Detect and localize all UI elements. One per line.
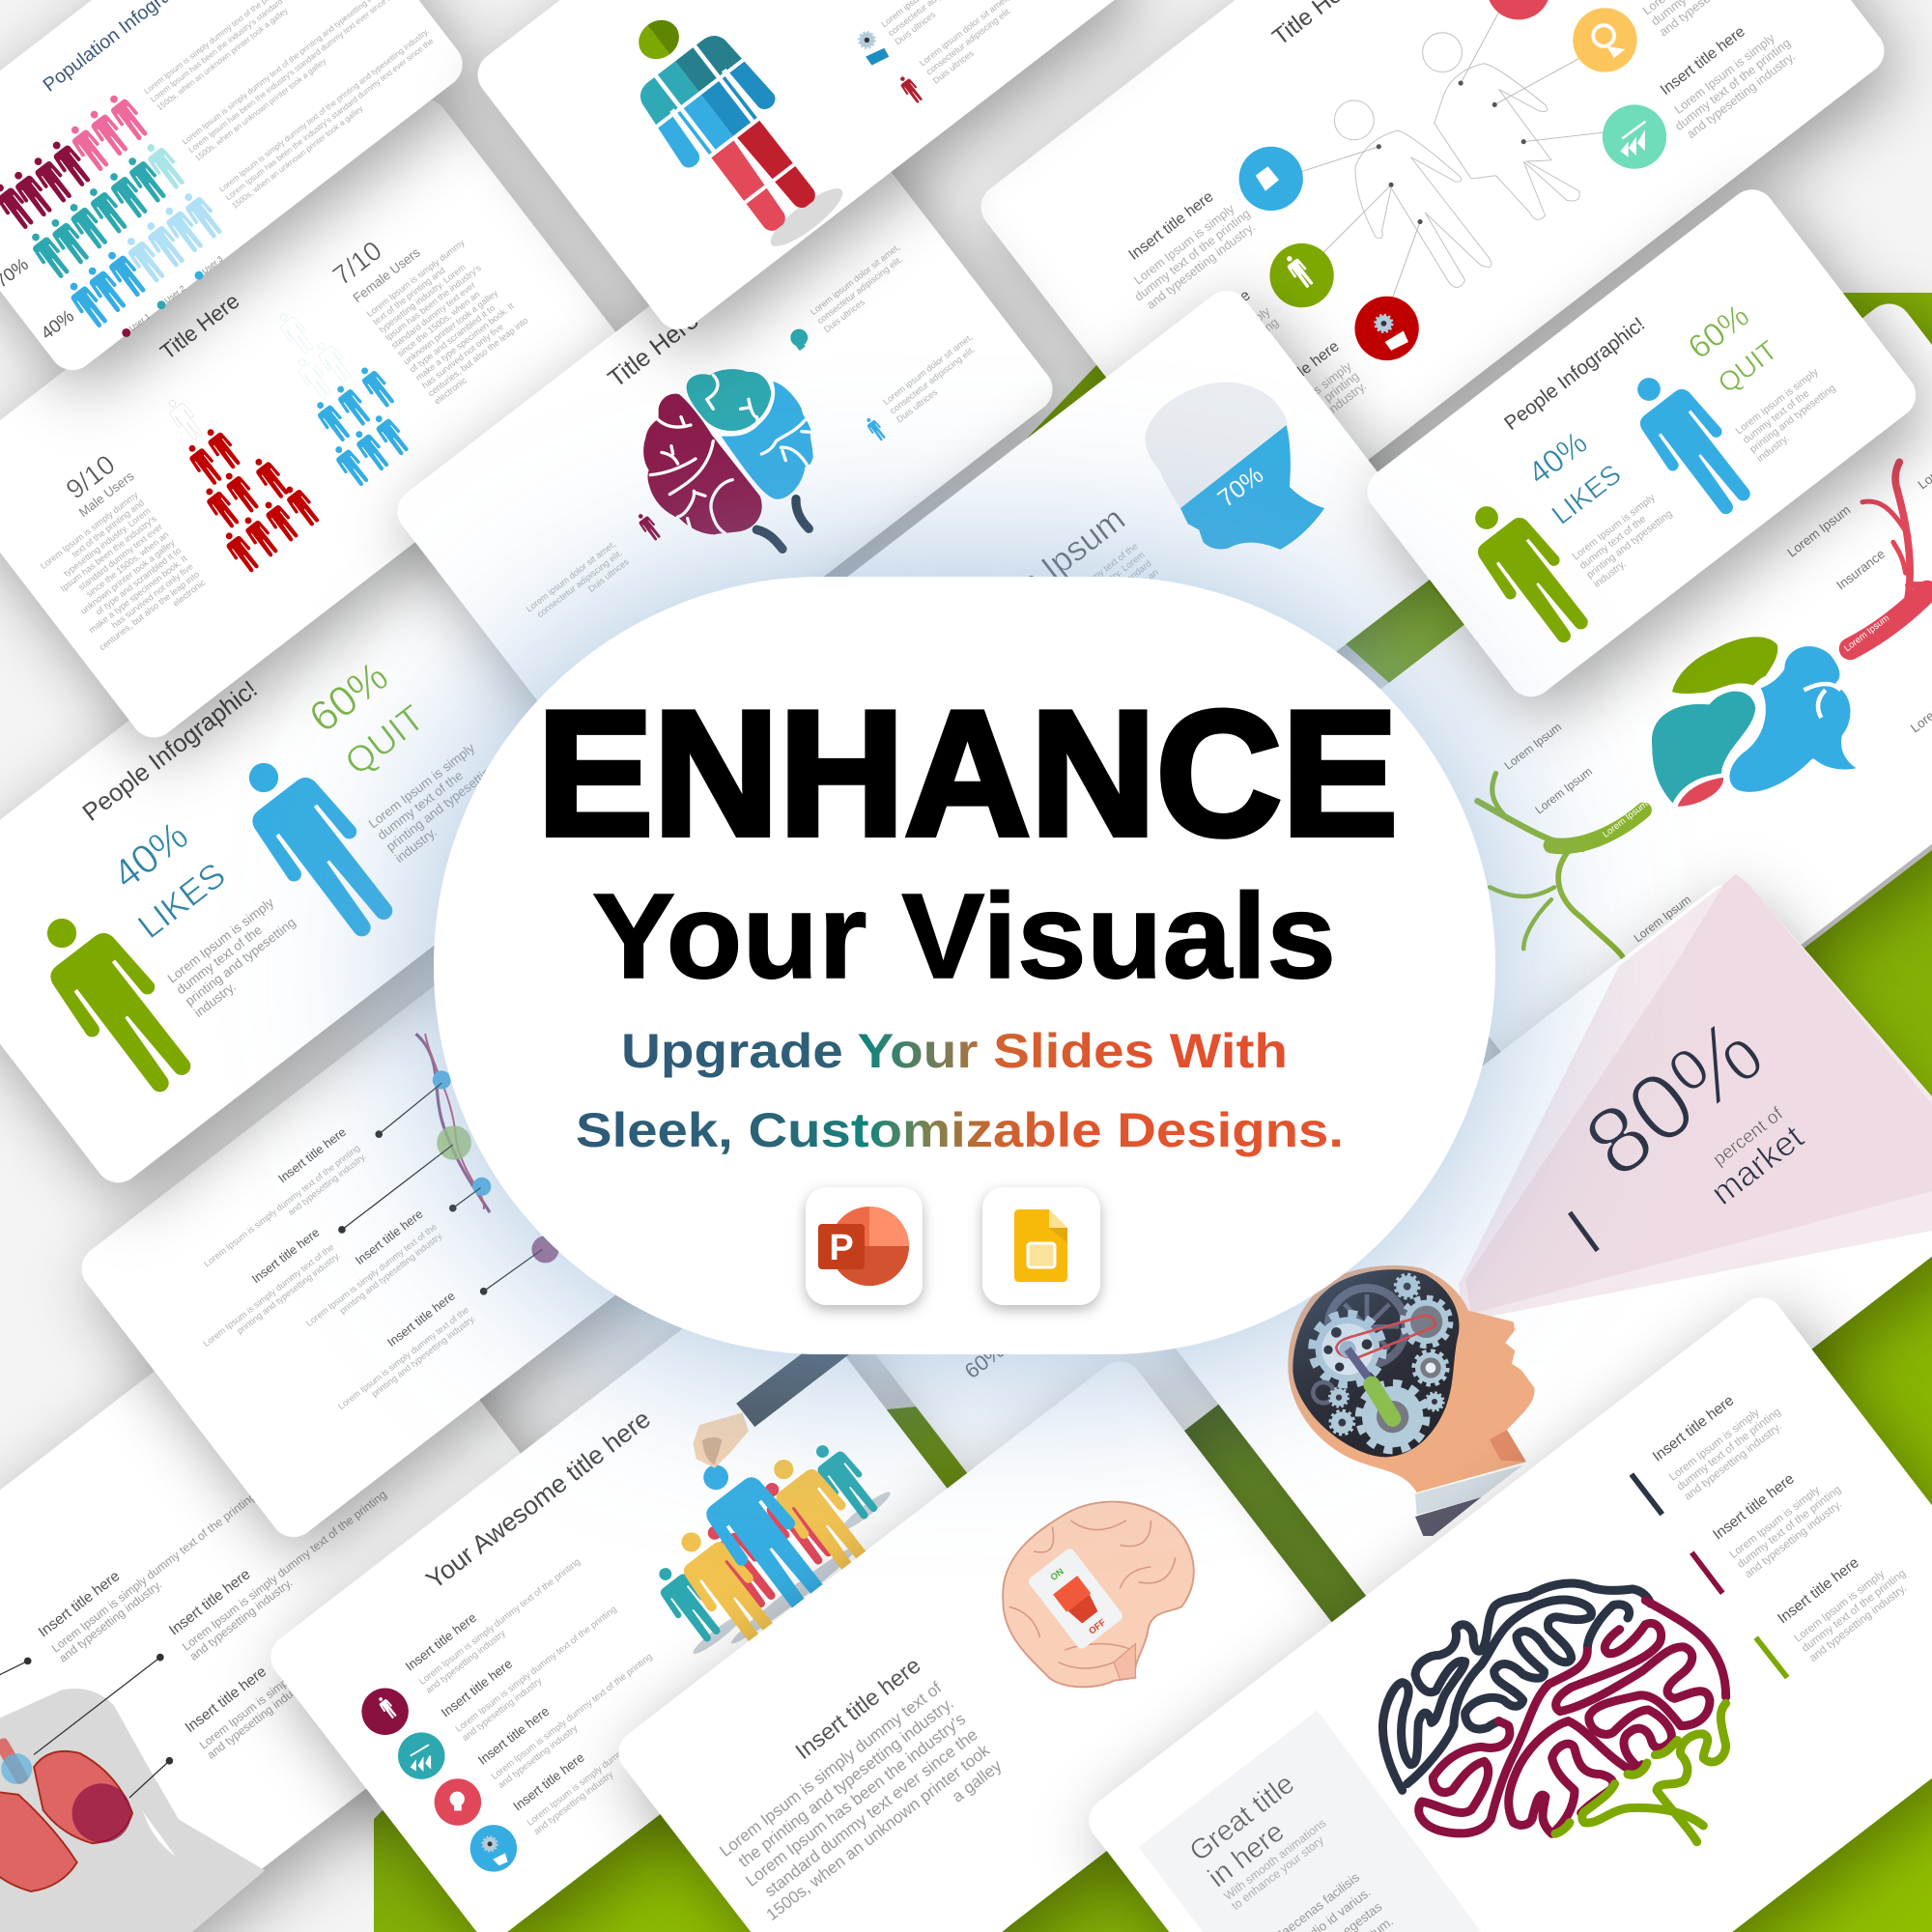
side icons and text (859, 0, 1024, 105)
80 percent stat: percent of (1710, 1103, 1787, 1170)
dividers and list text: Lorem Ipsum is simply (1667, 1406, 1762, 1484)
panel: brain title slide (D) (388, 139, 1062, 761)
legend: User 2 (162, 283, 187, 305)
stats: LIKES (1547, 459, 1627, 531)
list items (403, 1556, 697, 1837)
text: typesetting industry. Lorem (377, 262, 468, 335)
panel: large people and users slides (0, 90, 726, 1192)
heading and paragraphs: 1500s, when an unknown printer took a galley (155, 5, 290, 112)
heading and paragraphs: Lorem Ipsum has been the industry's standard dummy text ever since the (223, 36, 436, 202)
head chart 70% (1145, 383, 1324, 550)
side text: Duis ultrices (822, 297, 867, 334)
side text: consectetur adipiscing elit. (535, 548, 624, 619)
legend: User 1 (128, 311, 152, 333)
panel: maze brain slide (1080, 1289, 1932, 1932)
text: Ipsum has been the industry's (384, 263, 483, 343)
text block: Lorem Ipsum has been the industry's (742, 1709, 969, 1890)
text: has survived not only five (110, 561, 195, 630)
80 percent stat: market (1704, 1118, 1811, 1212)
text: electronic (171, 577, 208, 609)
text: Female Users (351, 244, 423, 305)
H slide text: dummy text of the printing (1160, 315, 1281, 412)
lungs slide text: Lorem Ipsum is simply dummy text of the printing (49, 1490, 259, 1656)
captions: Lorem Ipsum is simply (366, 741, 477, 831)
list items: Lorem Ipsum is simply dummy text of the printing (526, 1697, 691, 1829)
panel: lungs slide (0, 1225, 625, 1932)
list items: Lorem Ipsum is simply dummy text of the printing (490, 1652, 655, 1782)
heading and paragraphs: 1500s, when an unknown printer took a galley (193, 55, 328, 163)
captions: dummy text of the (1577, 513, 1648, 572)
pink beam cone (1459, 874, 1932, 1321)
H slide text: Lorem Ipsum is simply (1131, 201, 1236, 287)
people rows chart (0, 90, 227, 331)
captions: Lorem Ipsum is simply (165, 895, 276, 985)
brain with switch: ON (1048, 1567, 1066, 1583)
heading: Title Here (604, 307, 703, 393)
captions: printing and typesetting (1584, 508, 1675, 581)
captions: Lorem Ipsum is simply (1734, 366, 1821, 437)
great title box: With smooth animations (1221, 1816, 1328, 1903)
text: electronic (433, 375, 469, 407)
text block: 1500s, when an unknown printer took (762, 1740, 993, 1924)
text: Lorem Ipsum is simply dummy (365, 238, 467, 319)
lungs slide text: and typesetting industry. (56, 1577, 164, 1665)
dividers and list text: dummy text of the printing (1800, 1568, 1908, 1655)
panel: body veins slide (72, 852, 825, 1547)
great title box: to enhance your story (1229, 1833, 1327, 1913)
side text: consectetur adipiscing elit. (888, 344, 977, 415)
list items: Insert title here (439, 1657, 515, 1719)
small icons (635, 329, 888, 543)
lungs illustration (0, 1654, 265, 1932)
list items: Insert title here (510, 1750, 587, 1813)
side text: consectetur adipiscing elit. (815, 254, 904, 326)
heading and paragraphs: 1500s, when an unknown printer took a galley (230, 103, 365, 211)
green person (1454, 489, 1603, 655)
text block: the printing and typesetting industry. (734, 1693, 957, 1871)
captions: dummy text of the (375, 768, 466, 842)
heading: People Infographic! (1500, 313, 1649, 435)
text block: standard dummy text ever since the (760, 1724, 981, 1901)
heading and paragraphs (0, 0, 443, 343)
text: text of the printing and (71, 497, 146, 559)
veins slide text: printing and typesetting industry. (370, 1313, 477, 1399)
lungs slide text: Insert title here (36, 1568, 123, 1640)
dividers and list text: dummy text of the printing (1675, 1406, 1783, 1493)
text: of type and scrambled it to (94, 546, 183, 617)
blue person (1616, 360, 1765, 526)
neuron labels: Lorem Ipsum (1842, 612, 1891, 654)
side text: Lorem ipsum dolor sit amet, (809, 242, 901, 317)
veins slide text: printing and typesetting industry. (235, 1250, 342, 1336)
side icons and text: Duis ultrices (893, 10, 938, 46)
neuron labels (1502, 435, 1932, 945)
80 percent stat (1565, 997, 1811, 1251)
panel: gears head slide (G) (1153, 874, 1932, 1657)
head chart 70%: 70% (1213, 462, 1268, 513)
dividers and list text: dummy text of the printing (1735, 1484, 1843, 1571)
list items: and typesetting industry (497, 1723, 580, 1791)
two tone brain (643, 369, 813, 549)
captions: industry. (1591, 558, 1629, 590)
captions: industry. (191, 980, 239, 1020)
red neuron branch (1850, 462, 1932, 649)
heading and paragraphs: Lorem Ipsum is simply dummy text of the printing and typesetting industry. (217, 26, 431, 194)
legend (122, 253, 225, 337)
panel: standing man slide (C) (469, 0, 1134, 338)
subtitle line 2: Sleek, Customizable Designs. (576, 1103, 1344, 1157)
captions: Lorem Ipsum is simply (1571, 492, 1658, 562)
lungs slide text: and typesetting industry. (187, 1576, 296, 1663)
list items: and typesetting industry (461, 1676, 544, 1744)
maze brain (1382, 1583, 1726, 1842)
captions: industry. (1754, 433, 1792, 465)
lungs slide text: and typesetting industry. (205, 1674, 312, 1762)
list items: Lorem Ipsum is simply dummy text of the printing (454, 1604, 619, 1735)
panel: 60 percent slide (874, 1105, 1349, 1551)
list items: and typesetting industry (424, 1628, 508, 1696)
veins slide text: Insert title here (249, 1225, 322, 1286)
lungs slide text: Insert title here (183, 1663, 270, 1736)
neuron labels: Lorem Ipsum (1784, 502, 1853, 560)
text: Ipsum has been the industry's standard (1020, 558, 1153, 665)
text: of type and scrambled it to (408, 303, 497, 375)
H slide text: Insert title here (1126, 188, 1217, 264)
neuron labels: Lorem Ipsum (1631, 893, 1693, 945)
icon: Google Slides (982, 1187, 1100, 1305)
H slide text: dummy text of the printing (1672, 36, 1793, 133)
veins slide text: printing and typesetting industry. (338, 1230, 445, 1316)
veins slide text: Lorem Ipsum is simply dummy text of the (336, 1305, 470, 1411)
captions: dummy text of the (1741, 387, 1811, 446)
title Your Visuals: Your Visuals (592, 869, 1336, 1004)
text: Lorem Ipsum is simply dummy text of the (1001, 541, 1140, 652)
heading: Your Awesome title here (420, 1405, 656, 1595)
subtitle line 1: Upgrade Your Slides With (621, 1024, 1288, 1078)
icon: PowerPoint (806, 1187, 923, 1305)
dividers and list text: Lorem Ipsum is simply (1793, 1569, 1887, 1645)
text block: Insert title here (790, 1652, 925, 1764)
neuron labels: Insurance (1833, 547, 1888, 592)
H slide text: Insert title here (1163, 287, 1254, 362)
stats: QUIT (338, 697, 432, 783)
text: printing and typesetting industry. Lorem (1013, 550, 1147, 656)
H slide text: Lorem Ipsum is simply (1167, 303, 1273, 390)
icon: PowerPoint: P (829, 1228, 854, 1268)
panel: title here users slide (0, 90, 642, 747)
stats: 40% (1521, 424, 1594, 492)
veins slide text: Insert title here (353, 1207, 426, 1267)
lungs slide text: Lorem Ipsum is simply dummy (197, 1645, 330, 1752)
veins slide text (201, 1124, 477, 1420)
dividers and list text: and typesetting industry. (1743, 1498, 1844, 1580)
H slide text: Insert title here (1252, 338, 1343, 413)
title ENHANCE: ENHANCE (537, 673, 1398, 872)
text: 7/10 (327, 235, 387, 291)
heading: People Infographic! (78, 675, 263, 827)
segmented man figure (595, 0, 849, 256)
side icons and text: consectetur adipiscing elit. (924, 6, 1013, 77)
captions: dummy text of the (174, 923, 265, 997)
stats (104, 652, 432, 946)
side text: Lorem ipsum dolor sit amet, (881, 332, 975, 407)
veins slide text: Lorem Ipsum is simply dummy text of the (304, 1222, 439, 1328)
dividers and list text: Lorem Ipsum is simply (1728, 1485, 1822, 1561)
panel: central white blob (434, 577, 1495, 1354)
H slide text: Lorem Ipsum is simply (1671, 31, 1777, 117)
neuron labels: Lorem Ipsum (1601, 799, 1650, 840)
H slide text: Lorem Ipsum is simply (1248, 358, 1354, 445)
side text: Duis ultrices (586, 556, 631, 594)
text: 9/10 (61, 449, 121, 505)
text: has survived not only five (420, 322, 505, 390)
veins slide text: Insert title here (384, 1289, 458, 1350)
dividers and list text (1632, 1392, 1916, 1678)
green person (19, 895, 210, 1107)
captions: printing and typesetting (384, 760, 499, 854)
people and hand illustration (647, 1345, 894, 1659)
H slide text (1123, 0, 1802, 476)
text: make a type specimen book. It (87, 554, 189, 635)
brain with switch: OFF (1087, 1617, 1108, 1637)
lungs slide text: Insert title here (166, 1566, 253, 1638)
lungs slide text (36, 1488, 397, 1762)
text: unknown printer took a galley (402, 288, 499, 366)
text: dummy text ever since the 1500s, when an (1015, 567, 1160, 683)
captions: printing and typesetting (183, 915, 298, 1009)
80 percent stat: 80% (1565, 997, 1781, 1198)
text: Title Here (156, 289, 244, 364)
side text (525, 242, 988, 632)
text block: Lorem Ipsum is simply dummy text of (716, 1678, 945, 1861)
text: centuries, but also the leap into (426, 316, 530, 398)
great title box (1139, 1710, 1496, 1932)
H slide text: dummy text of the printing (1240, 368, 1362, 467)
panel: people infographic large (0, 432, 726, 1192)
multicolor brain (1650, 635, 1862, 809)
lungs slide text: Lorem Ipsum is simply dummy text of the printing (180, 1488, 389, 1654)
side text: Duis ultrices (895, 387, 940, 424)
text: text of the printing and (371, 266, 447, 327)
stats: QUIT (1713, 335, 1783, 400)
veins slide text: Lorem Ipsum is simply dummy text of the printing (202, 1143, 361, 1268)
panel: neuron brain slide (F) (1281, 295, 1932, 1129)
veins slide text: and typesetting industry. (286, 1151, 368, 1217)
text: centuries, but also the leap into (98, 569, 201, 652)
green backdrop shapes (374, 293, 1932, 1932)
veins slide text: Lorem Ipsum is simply dummy text of the (201, 1242, 336, 1349)
captions: printing and typesetting (1747, 383, 1838, 455)
text: make a type specimen book. It (414, 300, 516, 383)
text: since the 1500s, when an (84, 529, 170, 599)
text block: a galley (948, 1755, 1006, 1806)
panel: your awesome title slide (262, 1261, 998, 1932)
label 60%: 60% (960, 1338, 1009, 1383)
captions (1571, 364, 1845, 590)
list items: Lorem Ipsum is simply dummy text of the printing (417, 1556, 582, 1688)
legend: User 3 (200, 253, 225, 275)
side text: Lorem ipsum dolor sit amet, (525, 539, 617, 614)
dividers and list text: and typesetting industry. (1683, 1421, 1784, 1503)
veins illustration with callouts (339, 1034, 558, 1294)
text (36, 235, 536, 661)
dividers and list text: Insert title here (1710, 1470, 1798, 1544)
list items: and typesetting industry (532, 1769, 615, 1837)
neuron labels: Lorem Ipsum (1532, 764, 1595, 817)
H slide text: and typesetting industry. (1144, 219, 1258, 312)
text: standard dummy text ever (76, 522, 164, 592)
H slide text: and typesetting industry. (1684, 49, 1798, 141)
panel: people infographic small (P1) (1358, 181, 1924, 706)
text: unknown printer took a galley (79, 537, 177, 616)
panel: head 70 percent slide (E) (741, 282, 1449, 942)
H slide text: Insert title here (1658, 23, 1748, 99)
list items: Insert title here (475, 1704, 552, 1768)
green neuron branch (1477, 773, 1644, 961)
list icons (361, 1689, 517, 1872)
outline people and linked circles (1239, 0, 1666, 360)
dividers and list text: Insert title here (1775, 1554, 1862, 1627)
side icons and text: Duis ultrices (931, 48, 976, 86)
brain with switch (1003, 1502, 1194, 1687)
stats: 60% (300, 652, 397, 742)
blue person (221, 740, 412, 952)
stats (1521, 298, 1783, 531)
great title box: Great title (1183, 1768, 1300, 1868)
text block (714, 1652, 1006, 1932)
neuron labels: Lorem Ipsum (1502, 720, 1564, 773)
dividers and list text: Insert title here (1650, 1392, 1737, 1465)
stats: LIKES (130, 855, 233, 946)
red and blue people pyramids (163, 309, 412, 576)
panel: population infographic (0, 0, 471, 380)
H slide text: and typesetting industry. (1255, 378, 1369, 470)
great title box: in here (1202, 1815, 1291, 1893)
list items: Insert title here (403, 1610, 479, 1674)
text: Ipsum has been the industry's (59, 514, 158, 593)
heading and paragraphs: 40% (37, 305, 77, 343)
H slide text: dummy text of the printing (1131, 206, 1253, 304)
text: Lorem Ipsum is simply dummy (39, 490, 140, 571)
panel: switch brain slide (610, 1352, 1358, 1932)
panel: figure with people slide (H) (972, 0, 1893, 555)
text: Lorem Ipsum (949, 499, 1132, 653)
text: standard dummy text ever (389, 280, 477, 351)
dividers and list text: and typesetting industry. (1807, 1582, 1909, 1664)
stats: 40% (104, 812, 196, 897)
text: Male Users (76, 469, 137, 520)
veins slide text: Insert title here (275, 1124, 349, 1185)
stats: 60% (1682, 298, 1756, 366)
text: since the 1500s, when an (396, 289, 482, 358)
head with gears (1288, 1265, 1534, 1536)
captions: industry. (392, 825, 440, 866)
captions (165, 737, 508, 1020)
text: typesetting industry. Lorem (62, 505, 153, 579)
